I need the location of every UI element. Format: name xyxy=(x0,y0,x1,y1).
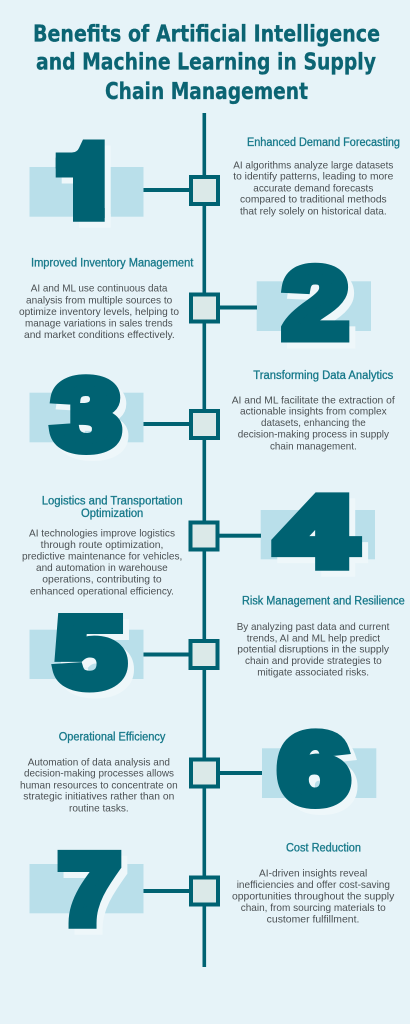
number 2 block xyxy=(257,248,371,364)
number 2 block: 2 xyxy=(290,254,354,364)
body 2: analysis from multiple sources to xyxy=(26,295,173,306)
body 1: that rely solely on historical data. xyxy=(240,206,387,217)
body 3: decision-making process in supply xyxy=(238,430,390,441)
number 4 block xyxy=(261,476,375,592)
connector and node 3 xyxy=(144,411,218,438)
heading 4 xyxy=(42,496,183,520)
body 6: human resources to concentrate on xyxy=(20,780,178,791)
number 1 block: 1 xyxy=(39,129,111,239)
body 5: chain and provide strategies to xyxy=(245,656,382,667)
body 2: AI and ML use continuous data xyxy=(31,284,168,295)
connector and node 4 xyxy=(190,522,261,550)
connector and node 5 xyxy=(144,641,218,668)
step 4: logistics and transportation optimization xyxy=(22,476,375,597)
title: Chain Management xyxy=(105,79,308,105)
heading 4: Optimization xyxy=(81,508,143,520)
body 2: optimize inventory levels, helping to xyxy=(19,307,179,318)
step 7: cost reduction xyxy=(30,834,395,950)
number 7 block: 7 xyxy=(59,834,120,944)
body 1: AI algorithms analyze large datasets xyxy=(233,160,393,171)
body 7: inefficiencies and offer cost-saving xyxy=(237,880,390,891)
heading 4: Logistics and Transportation xyxy=(42,496,183,508)
heading 7: Cost Reduction xyxy=(286,842,361,854)
body 4: and automation in warehouse xyxy=(36,563,168,574)
body 4: through route optimization, xyxy=(41,540,163,551)
number 5 block xyxy=(30,597,144,713)
number 5 block: 5 xyxy=(56,597,124,707)
number 3 block: 3 xyxy=(59,366,126,476)
body 1 xyxy=(233,160,394,217)
number 4 block: 4 xyxy=(283,482,361,592)
body 3: chain management. xyxy=(270,441,357,452)
body 2 xyxy=(19,284,179,341)
title xyxy=(33,22,380,105)
number 1 block: 1 xyxy=(45,135,117,245)
body 3: AI and ML facilitate the extraction of xyxy=(232,395,395,406)
body 6: routine tasks. xyxy=(69,803,129,814)
heading 2: Improved Inventory Management xyxy=(31,257,194,269)
heading 1: Enhanced Demand Forecasting xyxy=(247,137,400,149)
body 4: enhanced operational efficiency. xyxy=(30,586,174,597)
heading 5: Risk Management and Resilience xyxy=(242,595,405,607)
connector and node 2 xyxy=(191,294,257,322)
body 4: operations, contributing to xyxy=(42,575,162,586)
number 7 block xyxy=(30,834,144,950)
number 5 block: 5 xyxy=(62,603,130,713)
step 2: improved inventory management xyxy=(19,248,371,364)
body 5: potential disruptions in the supply xyxy=(237,645,390,656)
body 5: By analyzing past data and current xyxy=(237,622,390,633)
body 6: strategic initiatives rather than on xyxy=(23,792,175,803)
number 3 block xyxy=(30,360,144,476)
number 6 block xyxy=(262,714,376,830)
body 7: customer fulfillment. xyxy=(267,915,359,926)
body 1: compared to traditional methods xyxy=(240,195,387,206)
number 6 block: 6 xyxy=(279,714,349,824)
body 5 xyxy=(237,622,390,679)
connector and node 1 xyxy=(144,177,218,204)
step 3: transforming data analytics xyxy=(30,360,395,476)
body 4: predictive maintenance for vehicles, xyxy=(22,552,182,563)
body 3: actionable insights from complex xyxy=(240,407,388,418)
step 6: operational efficiency xyxy=(20,714,376,830)
body 1: accurate demand forecasts xyxy=(253,183,373,194)
body 6 xyxy=(20,757,178,814)
number 4 block: 4 xyxy=(277,476,355,586)
heading 3: Transforming Data Analytics xyxy=(253,370,394,382)
body 6: decision-making processes allows xyxy=(24,769,174,780)
number 2 block: 2 xyxy=(284,248,348,358)
connector and node 7 xyxy=(144,878,218,904)
body 2: and market conditions effectively. xyxy=(24,330,175,341)
body 2: manage variations in sales trends xyxy=(25,318,173,329)
number 7 block: 7 xyxy=(65,840,126,950)
body 6: Automation of data analysis and xyxy=(28,757,170,768)
step 5: risk management and resilience xyxy=(30,595,405,713)
step 1: enhanced demand forecasting xyxy=(30,136,400,222)
body 4 xyxy=(22,529,182,597)
body 4: AI technologies improve logistics xyxy=(29,529,175,540)
body 1: to identify patterns, leading to more xyxy=(233,172,394,183)
number 6 block: 6 xyxy=(285,720,355,830)
number 1 block xyxy=(30,140,144,222)
body 7 xyxy=(232,869,395,926)
connector and node 6 xyxy=(191,760,262,786)
body 7: opportunities throughout the supply xyxy=(232,892,395,903)
body 3 xyxy=(232,395,395,452)
body 5: trends, AI and ML help predict xyxy=(247,633,380,644)
body 3: datasets, enhancing the xyxy=(261,418,366,429)
timeline spine xyxy=(202,113,206,967)
heading 6: Operational Efficiency xyxy=(59,732,166,744)
body 7: AI-driven insights reveal xyxy=(259,869,367,880)
body 7: chain, from sourcing materials to xyxy=(241,903,386,914)
body 5: mitigate associated risks. xyxy=(257,668,369,679)
number 3 block: 3 xyxy=(53,360,120,470)
